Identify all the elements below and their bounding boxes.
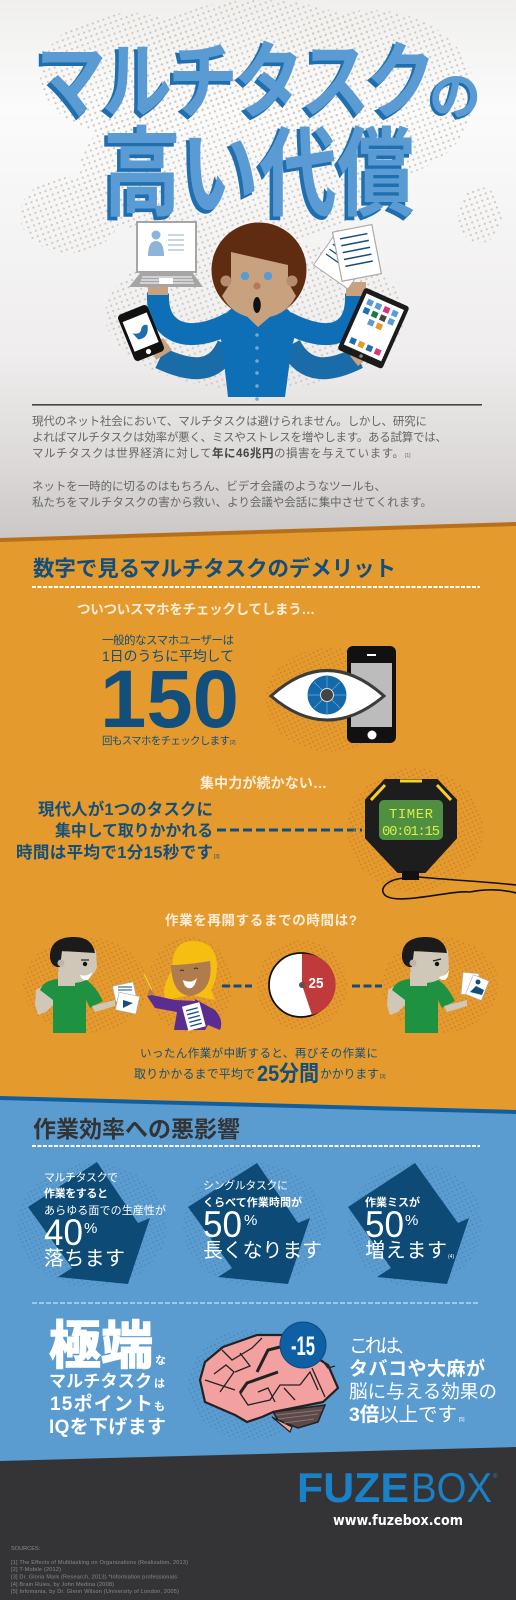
card: more errors: % [405, 1212, 418, 1229]
stat: extreme multitasking: も [154, 1400, 165, 1413]
neck [240, 310, 278, 327]
intro paragraph: よればマルチタスクは効率が悪く、ミスやストレスを増やします。ある試算では、 [32, 430, 447, 444]
card: more errors: (4) [448, 1254, 454, 1260]
stat: extreme multitasking: は [154, 1377, 165, 1390]
card: more errors: 作業ミスが [365, 1195, 420, 1209]
cards [113, 982, 140, 1014]
card: productivity drop: 40 [44, 1212, 83, 1253]
icon: stopwatch: 00:01:15 [382, 824, 440, 840]
caption: 25 minutes: 25分間 [257, 1061, 319, 1086]
sources: [3] Dr. Gloria Mark (Research, 2013) *Information professionals [11, 1574, 177, 1580]
subheading: resume: 作業を再開するまでの時間は? [165, 912, 357, 928]
logo: FuzeBox: ® [493, 1473, 498, 1480]
caption: 25 minutes: [3] [380, 1074, 386, 1080]
stat: extreme multitasking: 極端 [49, 1318, 153, 1376]
caption: 25 minutes: 取りかかるまで平均で [134, 1067, 255, 1081]
card: productivity drop [17, 1162, 167, 1287]
card: longer time: くらべて作業時間が [203, 1195, 302, 1209]
stat: focus duration [16, 799, 220, 862]
card: more errors: 50 [365, 1204, 404, 1245]
dashed divider [32, 1145, 480, 1147]
subheading: focus: 集中力が続かない… [200, 775, 327, 791]
icon: eye and phone [265, 646, 396, 752]
stat: extreme multitasking [49, 1318, 166, 1438]
card: longer time: % [244, 1212, 257, 1229]
intro paragraph: 私たちをマルチタスクの害から救い、より会議や会話に集中させてくれます。 [32, 495, 432, 509]
icon: twitter phone [117, 304, 165, 362]
title face: マルチタスク [36, 36, 436, 129]
icon: laptop [129, 222, 203, 287]
card: productivity drop: 作業をすると [44, 1186, 108, 1200]
stat: focus duration: 集中して取りかかれる [55, 822, 213, 840]
intro paragraph: マルチタスクは世界経済に対して年に46兆円の損害を与えています。 [32, 446, 404, 460]
card: longer time: 50 [203, 1204, 242, 1245]
icon: papers [314, 225, 381, 289]
text: comparison to tobacco and cannabis: 3倍以上です [349, 1404, 457, 1426]
intro paragraph: 現代のネット社会において、マルチタスクは避けられません。しかし、研究に [32, 414, 427, 428]
stat: 150 checks: 一般的なスマホユーザーは [102, 633, 234, 647]
section heading: numbers: 数字で見るマルチタスクのデメリット [33, 556, 396, 581]
stat: 150 checks: [2] [230, 740, 236, 746]
panel: orange section [0, 522, 516, 1112]
intro paragraph: ネットを一時的に切るのはもちろん、ビデオ会議のようなツールも、 [32, 479, 386, 493]
title [33, 36, 481, 232]
icon: 25 minute clock [257, 940, 347, 1030]
card: productivity drop: マルチタスクで [44, 1171, 118, 1184]
torso [220, 308, 296, 397]
illustration: man returning to task [382, 937, 498, 1033]
panel: footer [0, 1447, 516, 1600]
stat: 150 checks: 回もスマホをチェックします [102, 735, 230, 747]
badge: minus 15: -15 [291, 1331, 315, 1361]
stat: 150 checks: 1日のうちに平均して [102, 648, 234, 664]
sources: [5] Infomania, by Dr. Glenn Wilson (University of London, 2005) [11, 1589, 179, 1595]
text: comparison to tobacco and cannabis: タバコや大麻が [349, 1357, 485, 1380]
header background [0, 0, 516, 545]
section heading: productivity: 作業効率への悪影響 [33, 1116, 240, 1142]
stat: extreme multitasking: IQを下げます [49, 1416, 166, 1438]
ears [220, 276, 232, 286]
title shadow [33, 39, 479, 232]
logo: FuzeBox: BOX [411, 1464, 492, 1511]
title shadow: 高い代償 [100, 123, 412, 232]
sources: [2] T-Mobile (2012) [11, 1567, 61, 1573]
illustration: multitasking man [148, 222, 368, 401]
text: comparison to tobacco and cannabis [349, 1336, 497, 1426]
logo: FuzeBox: FUZE [297, 1464, 409, 1511]
dashed divider [32, 586, 480, 588]
thin dashed divider [32, 1302, 480, 1304]
icon: stopwatch [347, 768, 516, 899]
dashes: clock to man [352, 984, 382, 988]
shirt buttons [255, 333, 259, 401]
stat: focus duration: 現代人が1つのタスクに [38, 799, 213, 819]
face [222, 252, 296, 318]
stat: 150 checks: 150 [100, 654, 239, 745]
card: more errors [348, 1163, 482, 1287]
stat: focus duration: [3] [214, 854, 220, 860]
stat: extreme multitasking: マルチタスク [49, 1372, 152, 1391]
logo: FuzeBox [297, 1464, 498, 1511]
title face: 高い代償 [103, 120, 415, 229]
dashed connector [217, 828, 362, 832]
title shadow: マルチタスク [33, 39, 433, 132]
title face [36, 36, 481, 229]
lower arms [160, 345, 358, 368]
cards [461, 972, 489, 1001]
icon: brain [188, 1330, 338, 1440]
card: longer time: 長くなります [203, 1240, 322, 1262]
icon: tablet [337, 287, 410, 369]
stat: extreme multitasking: 15ポイント [50, 1392, 153, 1415]
intro rule [32, 404, 482, 406]
hands [148, 282, 368, 366]
title face: の [429, 69, 481, 127]
sources: [4] Brain Rules, by John Medina (2008) [11, 1582, 114, 1588]
sources: [1] The Effects of Multitasking on Organizations (Realization, 2013) [11, 1560, 188, 1566]
sources [11, 1546, 188, 1595]
illustration: woman [144, 937, 232, 1033]
icon: stopwatch: TIMER [389, 807, 434, 823]
intro paragraph: [1] [405, 453, 411, 459]
card: longer time [183, 1163, 327, 1287]
caption: 25 minutes [134, 1046, 386, 1086]
intro paragraph [32, 414, 447, 509]
icon: 25 minute clock: 25 [308, 975, 324, 992]
nose [253, 282, 261, 290]
sources: SOURCES: [11, 1546, 41, 1552]
caption: 25 minutes: いったん作業が中断すると、再びその作業に [140, 1046, 378, 1060]
text: comparison to tobacco and cannabis: [5] [459, 1417, 465, 1423]
card: productivity drop: あらゆる面での生産性が [44, 1203, 166, 1217]
mouth [253, 297, 261, 313]
title shadow: の [427, 71, 479, 129]
eyes [241, 272, 249, 280]
subheading: phone checking: ついついスマホをチェックしてしまう… [77, 602, 315, 617]
website url: www.fuzebox.com [333, 1513, 463, 1529]
dashes: woman to clock [222, 984, 252, 988]
card: more errors: 増えます [365, 1239, 447, 1262]
illustration: man with cards [23, 937, 147, 1033]
badge: minus 15 [280, 1322, 326, 1368]
card: longer time: シングルタスクに [203, 1178, 288, 1192]
card: productivity drop: 落ちます [44, 1247, 125, 1270]
panel: blue section [0, 1096, 516, 1475]
hair [212, 222, 306, 318]
stat: extreme multitasking: な [155, 1354, 166, 1367]
text: comparison to tobacco and cannabis: 脳に与える効果の [349, 1381, 497, 1402]
world map dot pattern [20, 0, 502, 390]
text: comparison to tobacco and cannabis: これは、 [349, 1336, 415, 1357]
stat: focus duration: 時間は平均で1分15秒です [16, 843, 213, 862]
card: productivity drop: % [84, 1220, 97, 1237]
caption: 25 minutes: かかります [320, 1067, 379, 1081]
upper arms [158, 293, 356, 334]
